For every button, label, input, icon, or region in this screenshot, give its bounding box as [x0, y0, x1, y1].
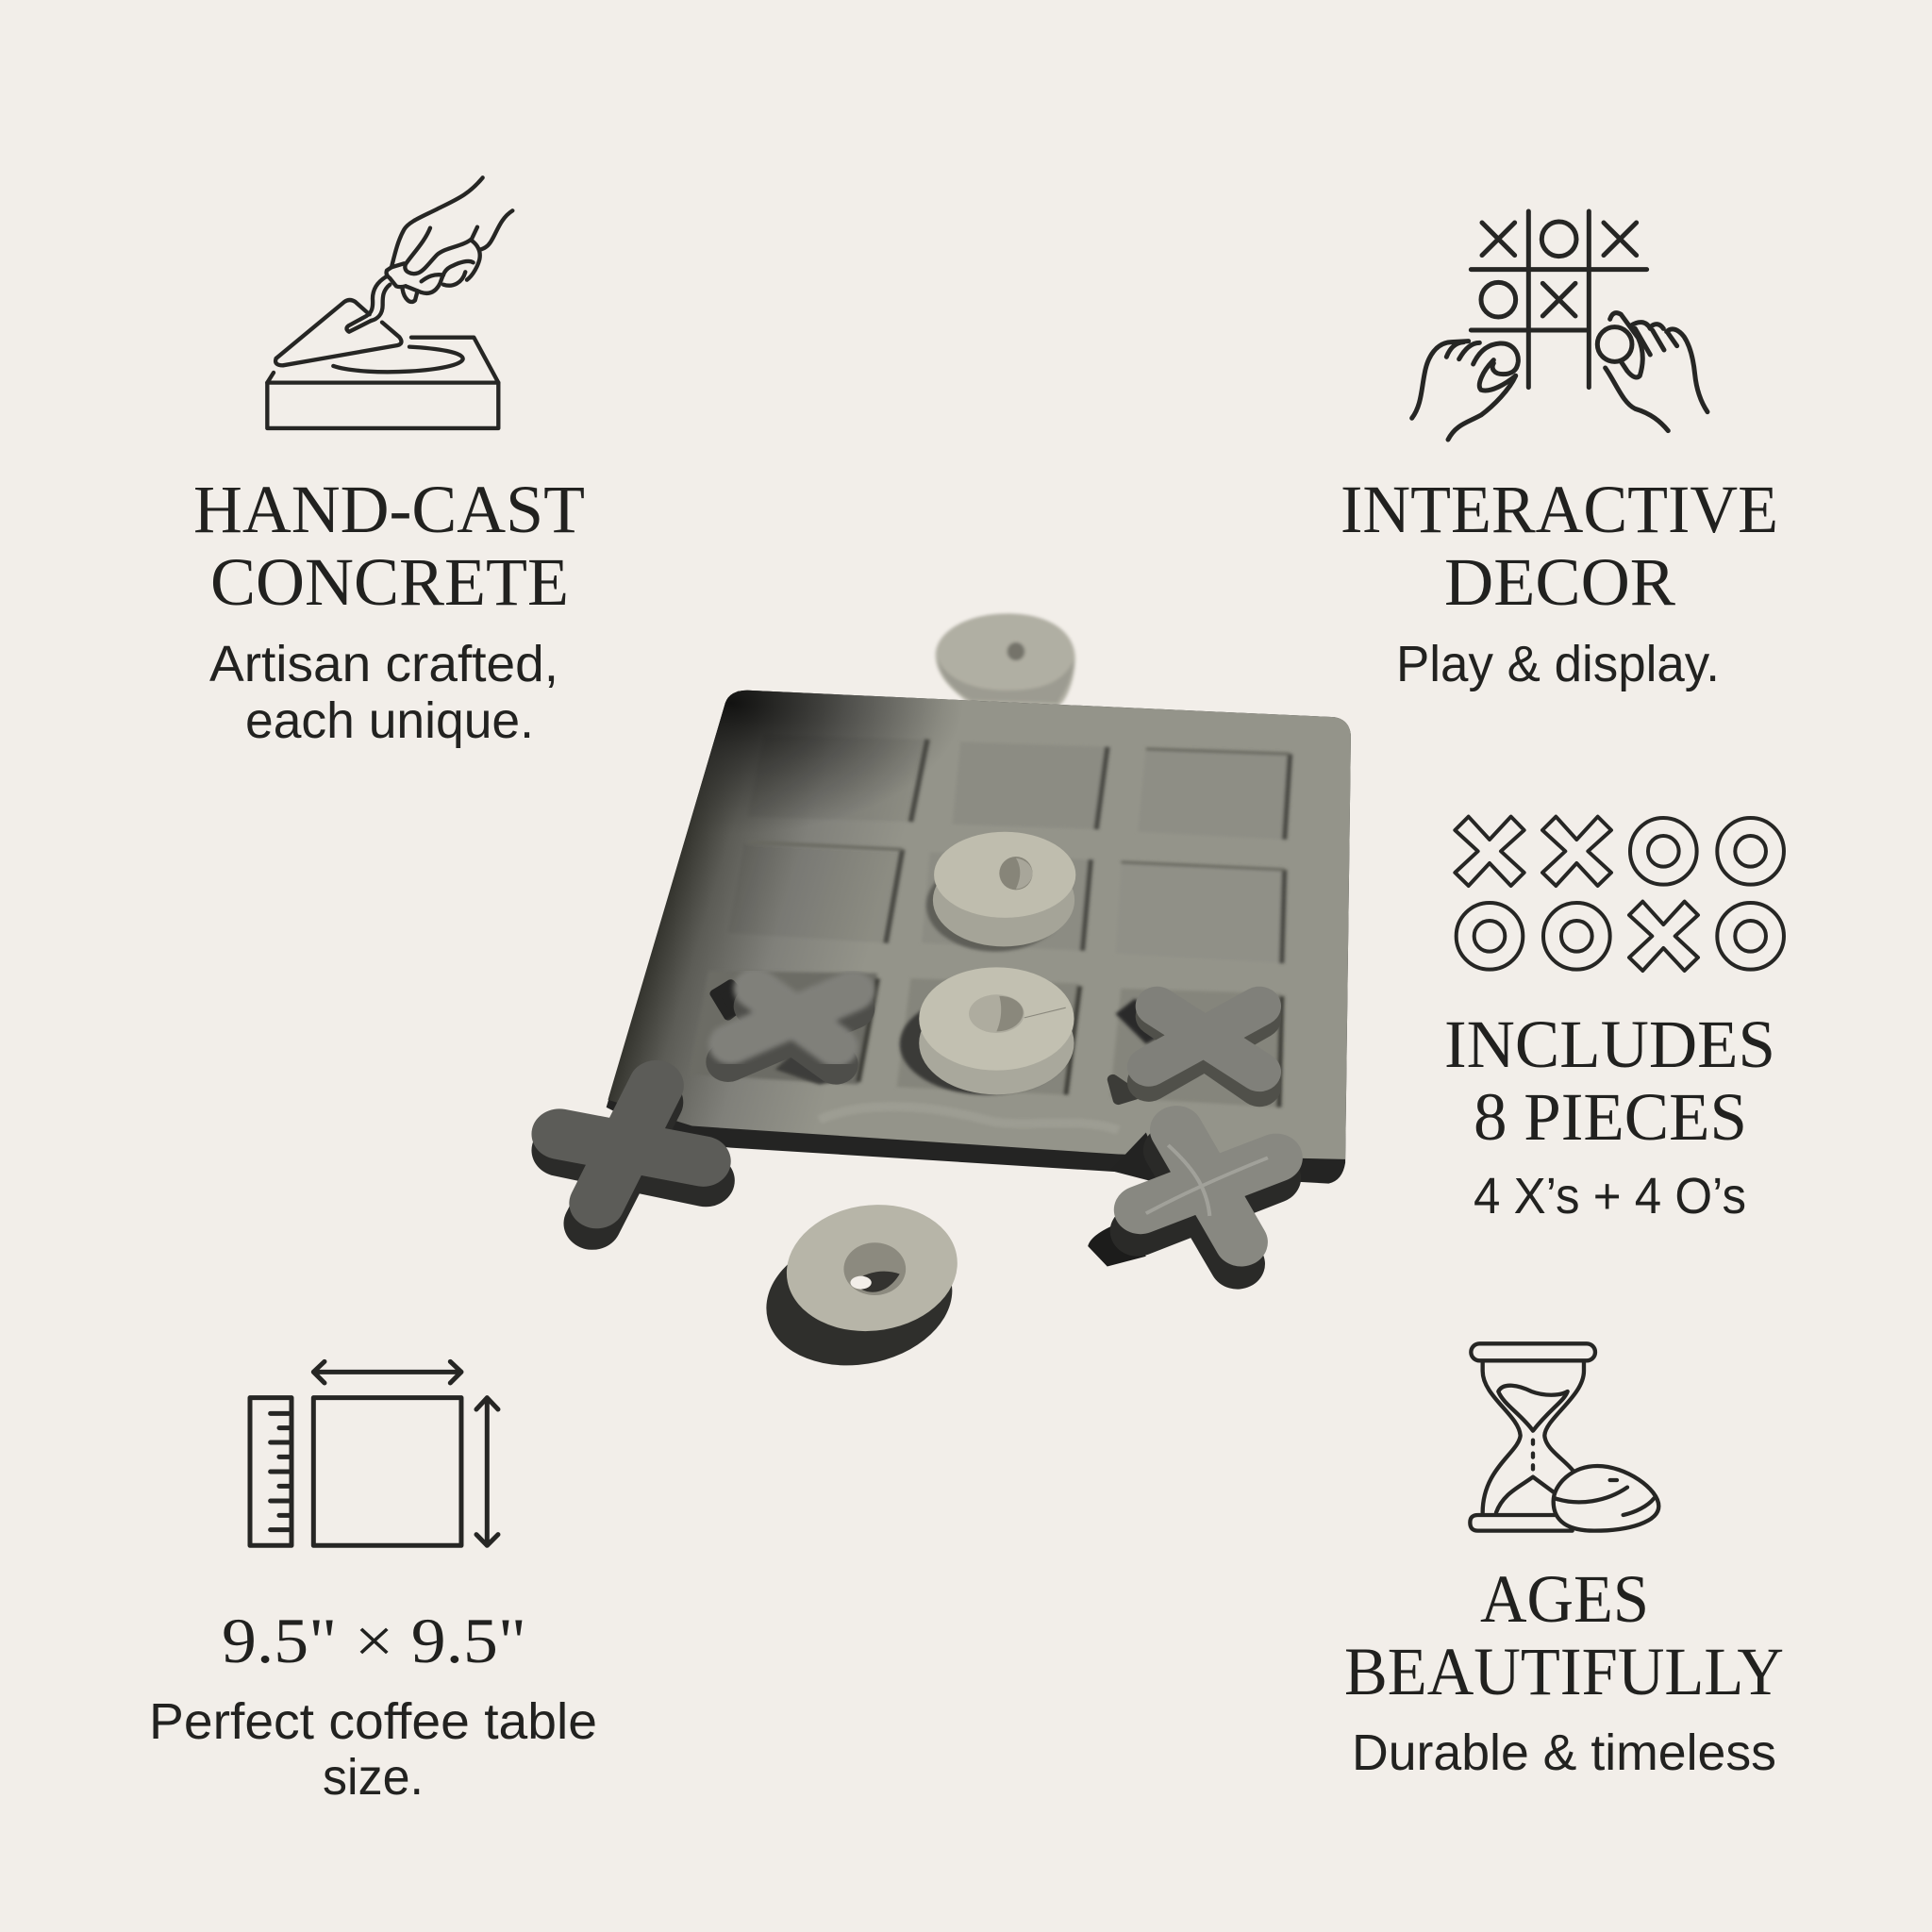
text: artisan crafted: Artisan crafted,: [209, 636, 558, 692]
heading: interactive decor: INTERACTIVE: [1341, 472, 1778, 547]
panel: interactive decor: [1341, 211, 1778, 692]
heading: hand-cast concrete: [193, 472, 585, 620]
heading: ages beautifully: [1344, 1561, 1784, 1709]
game piece: X lying front right: [1088, 1130, 1276, 1266]
text: coffee table size: Perfect coffee table: [149, 1693, 597, 1750]
heading: hand-cast concrete: CONCRETE: [210, 544, 569, 620]
game piece: blurred O resting behind board: [936, 613, 1075, 707]
board: [607, 691, 1351, 1184]
text: artisan crafted: each unique.: [245, 692, 534, 749]
heading: ages beautifully: AGES: [1480, 1561, 1649, 1637]
game piece: X lying front left: [559, 1086, 706, 1224]
text: piece count: 4 X’s + 4 O’s: [1474, 1168, 1746, 1224]
icon: hourglass with pebble: [1470, 1343, 1658, 1531]
game piece: O in centre cell: [926, 832, 1075, 952]
heading: dimensions: 9.5" × 9.5": [222, 1605, 526, 1676]
board cells: [690, 735, 1290, 1108]
game piece: O lying in front: [751, 1192, 969, 1383]
icon: ruler, square and dimension arrows: [250, 1361, 498, 1545]
text: play and display: Play & display.: [1396, 636, 1720, 692]
game piece: X in bottom-left cell: [714, 983, 853, 1085]
panel: size: [149, 1361, 597, 1806]
icon: tic-tac-toe grid with two hands: [1412, 211, 1707, 440]
board edge texture: [820, 1107, 1118, 1130]
panel: ages beautifully: [1344, 1343, 1784, 1781]
heading: includes 8 pieces: INCLUDES: [1444, 1007, 1775, 1082]
panel: includes 8 pieces: [1444, 817, 1784, 1224]
icon: four X and four O outlines: [1455, 817, 1784, 971]
heading: includes 8 pieces: 8 PIECES: [1474, 1079, 1747, 1155]
game piece: X in bottom-right cell: [1113, 999, 1259, 1100]
product photo: concrete tic-tac-toe board and pieces: [559, 613, 1351, 1383]
heading: interactive decor: DECOR: [1444, 544, 1675, 620]
text: coffee table size: [149, 1693, 597, 1806]
panel: hand-cast concrete: [193, 177, 585, 749]
heading: hand-cast concrete: HAND-CAST: [193, 472, 585, 547]
heading: ages beautifully: BEAUTIFULLY: [1344, 1634, 1784, 1709]
text: artisan crafted: [209, 636, 558, 749]
heading: includes 8 pieces: [1444, 1007, 1775, 1155]
text: durable and timeless: Durable & timeless: [1352, 1724, 1776, 1781]
game piece: O in bottom-centre cell: [900, 967, 1074, 1094]
icon: hand with trowel over concrete block: [267, 177, 512, 428]
heading: interactive decor: [1341, 472, 1778, 620]
text: coffee table size: size.: [323, 1749, 424, 1806]
